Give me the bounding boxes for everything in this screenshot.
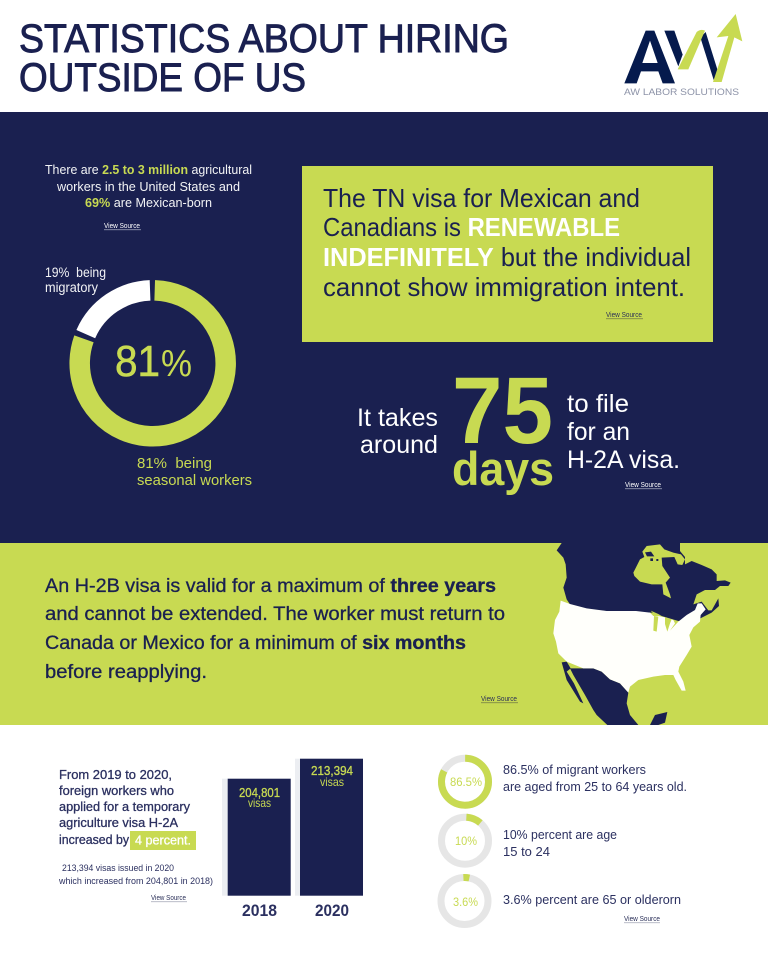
text: aged 25 to 64: 86.5% of migrant workers (503, 762, 646, 777)
source link: View Source (624, 916, 660, 923)
callout: TN visa: View Source (606, 312, 642, 319)
panel: navy statistics (0, 112, 768, 543)
highlight: 4 percent (130, 831, 196, 850)
donut: 3.6 percent: 3.6% (453, 895, 478, 909)
stat: 75 days: days (452, 442, 554, 495)
donut: 10 percent: 10% (455, 834, 477, 848)
donut: 10 percent (440, 815, 490, 866)
highlight: 4 percent: 4 percent. (135, 832, 191, 848)
title (19, 17, 509, 100)
label: 19 percent migratory: migratory (45, 280, 98, 295)
text: aged 25 to 64: are aged from 25 to 64 years old. (503, 779, 687, 794)
text: H-2B visa rules: Canada or Mexico for a minimum of six months (45, 633, 466, 654)
panel: migrant worker ages (440, 757, 687, 925)
stat: 75 days: View Source (625, 482, 661, 489)
donut: 86.5 percent: 86.5% (450, 775, 482, 789)
callout: TN visa: Canadians is RENEWABLE (323, 212, 620, 242)
donut chart: 81 percent seasonal (56, 267, 249, 460)
text: visas issued: which increased from 204,801 in 2018) (58, 876, 213, 887)
stat: 75 days: for an (567, 418, 630, 446)
text: H-2A increase: agriculture visa H-2A (59, 815, 178, 830)
label: 81 percent seasonal workers: 81% being (137, 455, 212, 472)
text: H-2B visa rules: before reapplying. (45, 662, 207, 683)
text: H-2A increase: applied for a temporary (59, 799, 190, 814)
text: H-2B visa rules (45, 576, 505, 683)
bar chart: visas by year: visas (320, 775, 344, 789)
logo: AW Labor Solutions (624, 14, 742, 98)
stat: 75 days: It takes (357, 404, 438, 432)
map: North America (553, 543, 731, 725)
text: H-2B visa rules: and cannot be extended. The worker must return to (45, 604, 505, 625)
text: H-2A increase (59, 767, 190, 847)
text: H-2A increase: From 2019 to 2020, (59, 767, 172, 782)
text: agricultural workers (45, 162, 252, 210)
callout: TN visa (302, 166, 713, 342)
callout: TN visa: The TN visa for Mexican and (323, 183, 640, 213)
panel: visa applications (58, 759, 363, 920)
bar chart: visas by year: 2018 (242, 901, 277, 920)
bar chart: visas by year: 2020 (315, 901, 349, 920)
panel: H-2B visa (0, 543, 768, 725)
label: 19 percent migratory (45, 265, 106, 295)
text: aged 25 to 64 (503, 762, 687, 794)
text: visas issued (58, 863, 213, 887)
label: 81 percent seasonal workers: seasonal workers (137, 472, 252, 489)
text: H-2A increase: foreign workers who (59, 783, 174, 798)
bar chart: visas by year: 213,394 (311, 764, 353, 778)
stat: 75 days: 75 (452, 358, 553, 464)
text: aged 15 to 24 (503, 827, 617, 859)
donut: 86.5 percent (441, 757, 489, 806)
donut: 3.6 percent (441, 877, 488, 925)
text: agricultural workers: 69% are Mexican-born (85, 195, 212, 210)
donut chart: 81 percent seasonal: % (161, 343, 192, 385)
source link: View Source (481, 696, 517, 703)
callout: TN visa: cannot show immigration intent. (323, 272, 685, 302)
text: aged 15 to 24: 15 to 24 (503, 844, 550, 859)
logo: AW Labor Solutions: AW LABOR SOLUTIONS (624, 87, 739, 98)
callout: TN visa: INDEFINITELY but the individual (323, 242, 691, 272)
text: agricultural workers: workers in the United States and (56, 179, 240, 194)
text: H-2B visa rules: An H-2B visa is valid for a maximum of three years (45, 576, 496, 597)
bar chart: visas by year: visas (248, 796, 271, 810)
label: 19 percent migratory: 19% being (45, 265, 106, 280)
bar chart: visas by year (222, 759, 363, 920)
source link: View Source (104, 223, 140, 230)
bar chart: visas by year: 204,801 (239, 786, 280, 800)
text: 65 or older: 3.6% percent are 65 or olderorn (503, 892, 681, 907)
text: aged 15 to 24: 10% percent are age (503, 827, 617, 842)
stat: 75 days (357, 358, 680, 495)
label: 81 percent seasonal workers (137, 455, 252, 489)
stat: 75 days: H-2A visa. (567, 446, 680, 474)
text: H-2A increase: increased by (59, 832, 129, 847)
stat: 75 days: around (360, 431, 438, 459)
source link: View Source (151, 895, 186, 902)
header (19, 14, 742, 100)
title: STATISTICS ABOUT HIRING (19, 17, 509, 61)
text: visas issued: 213,394 visas issued in 2020 (62, 863, 174, 874)
stat: 75 days: to file (567, 390, 629, 418)
title: OUTSIDE OF US (19, 56, 306, 100)
donut chart: 81 percent seasonal: 81 (115, 337, 160, 386)
text: agricultural workers: There are 2.5 to 3 million agricultural (45, 162, 252, 177)
